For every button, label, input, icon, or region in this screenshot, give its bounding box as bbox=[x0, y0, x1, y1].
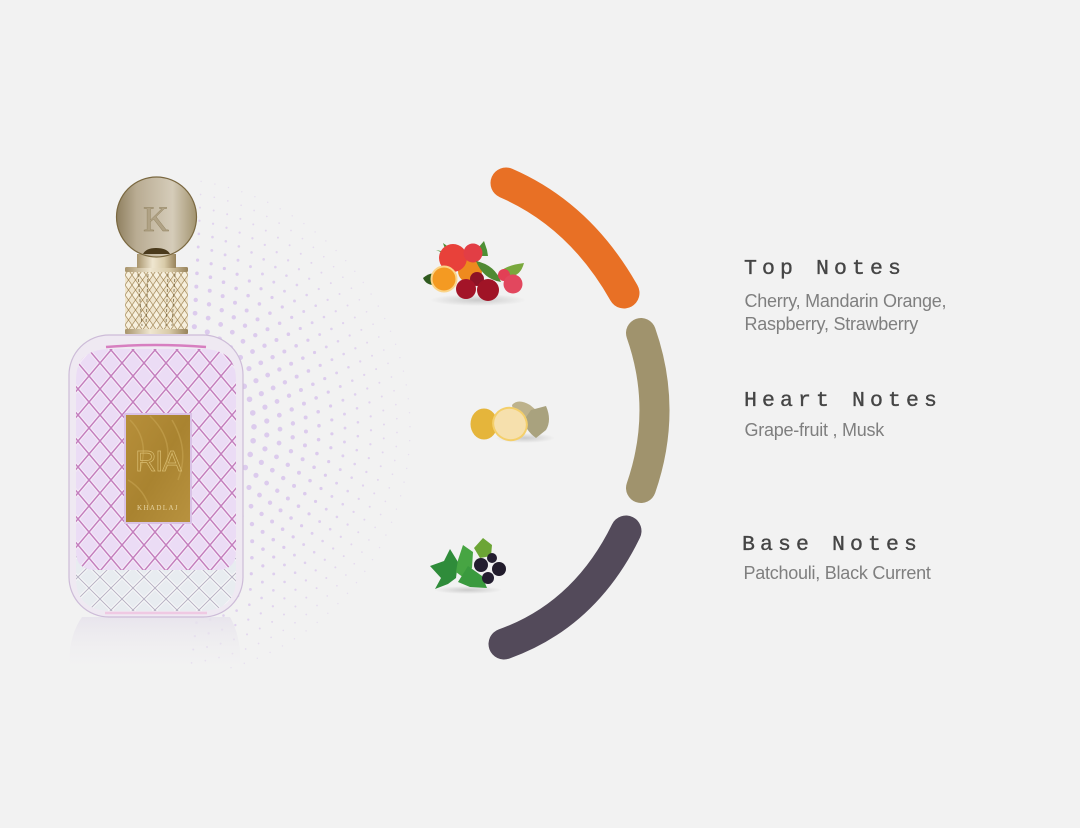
round cap bbox=[116, 177, 196, 257]
icon: mint and black currant bbox=[430, 538, 506, 594]
arc segment: base notes bbox=[504, 531, 626, 644]
clear glass base bbox=[76, 556, 236, 611]
round cap: K bbox=[143, 199, 169, 239]
gold label: KHADLAJ bbox=[137, 504, 179, 512]
gold label bbox=[124, 413, 192, 524]
heading: heart notes: Heart Notes bbox=[744, 389, 942, 413]
ingredients: base notes: Patchouli, Black Current bbox=[744, 563, 931, 583]
text block: top notes bbox=[744, 257, 946, 334]
ingredients: heart notes: Grape-fruit , Musk bbox=[744, 420, 885, 440]
pink lattice bbox=[76, 349, 236, 570]
icon: grapefruit and musk bbox=[470, 402, 555, 446]
bottle glass body bbox=[69, 335, 243, 617]
ingredients: top notes: Cherry, Mandarin Orange, bbox=[744, 291, 946, 311]
halftone dot arc bbox=[190, 180, 410, 668]
ingredients: top notes: Raspberry, Strawberry bbox=[744, 314, 918, 334]
heading: base notes: Base Notes bbox=[742, 533, 922, 557]
gold label: RIA bbox=[135, 446, 182, 478]
glass base highlight bbox=[105, 612, 207, 614]
icon: mixed fruit bbox=[423, 241, 526, 306]
arc segment: top notes bbox=[506, 183, 624, 293]
knurled collar bbox=[125, 267, 188, 334]
bottle reflection bbox=[69, 617, 241, 676]
cap neck bbox=[137, 254, 176, 268]
text block: heart notes bbox=[744, 389, 942, 440]
glass shoulder bbox=[106, 345, 206, 347]
text block: base notes bbox=[742, 533, 931, 583]
perfume bottle bbox=[69, 177, 243, 676]
arc segment: heart notes bbox=[641, 333, 654, 488]
heading: top notes: Top Notes bbox=[744, 257, 906, 281]
